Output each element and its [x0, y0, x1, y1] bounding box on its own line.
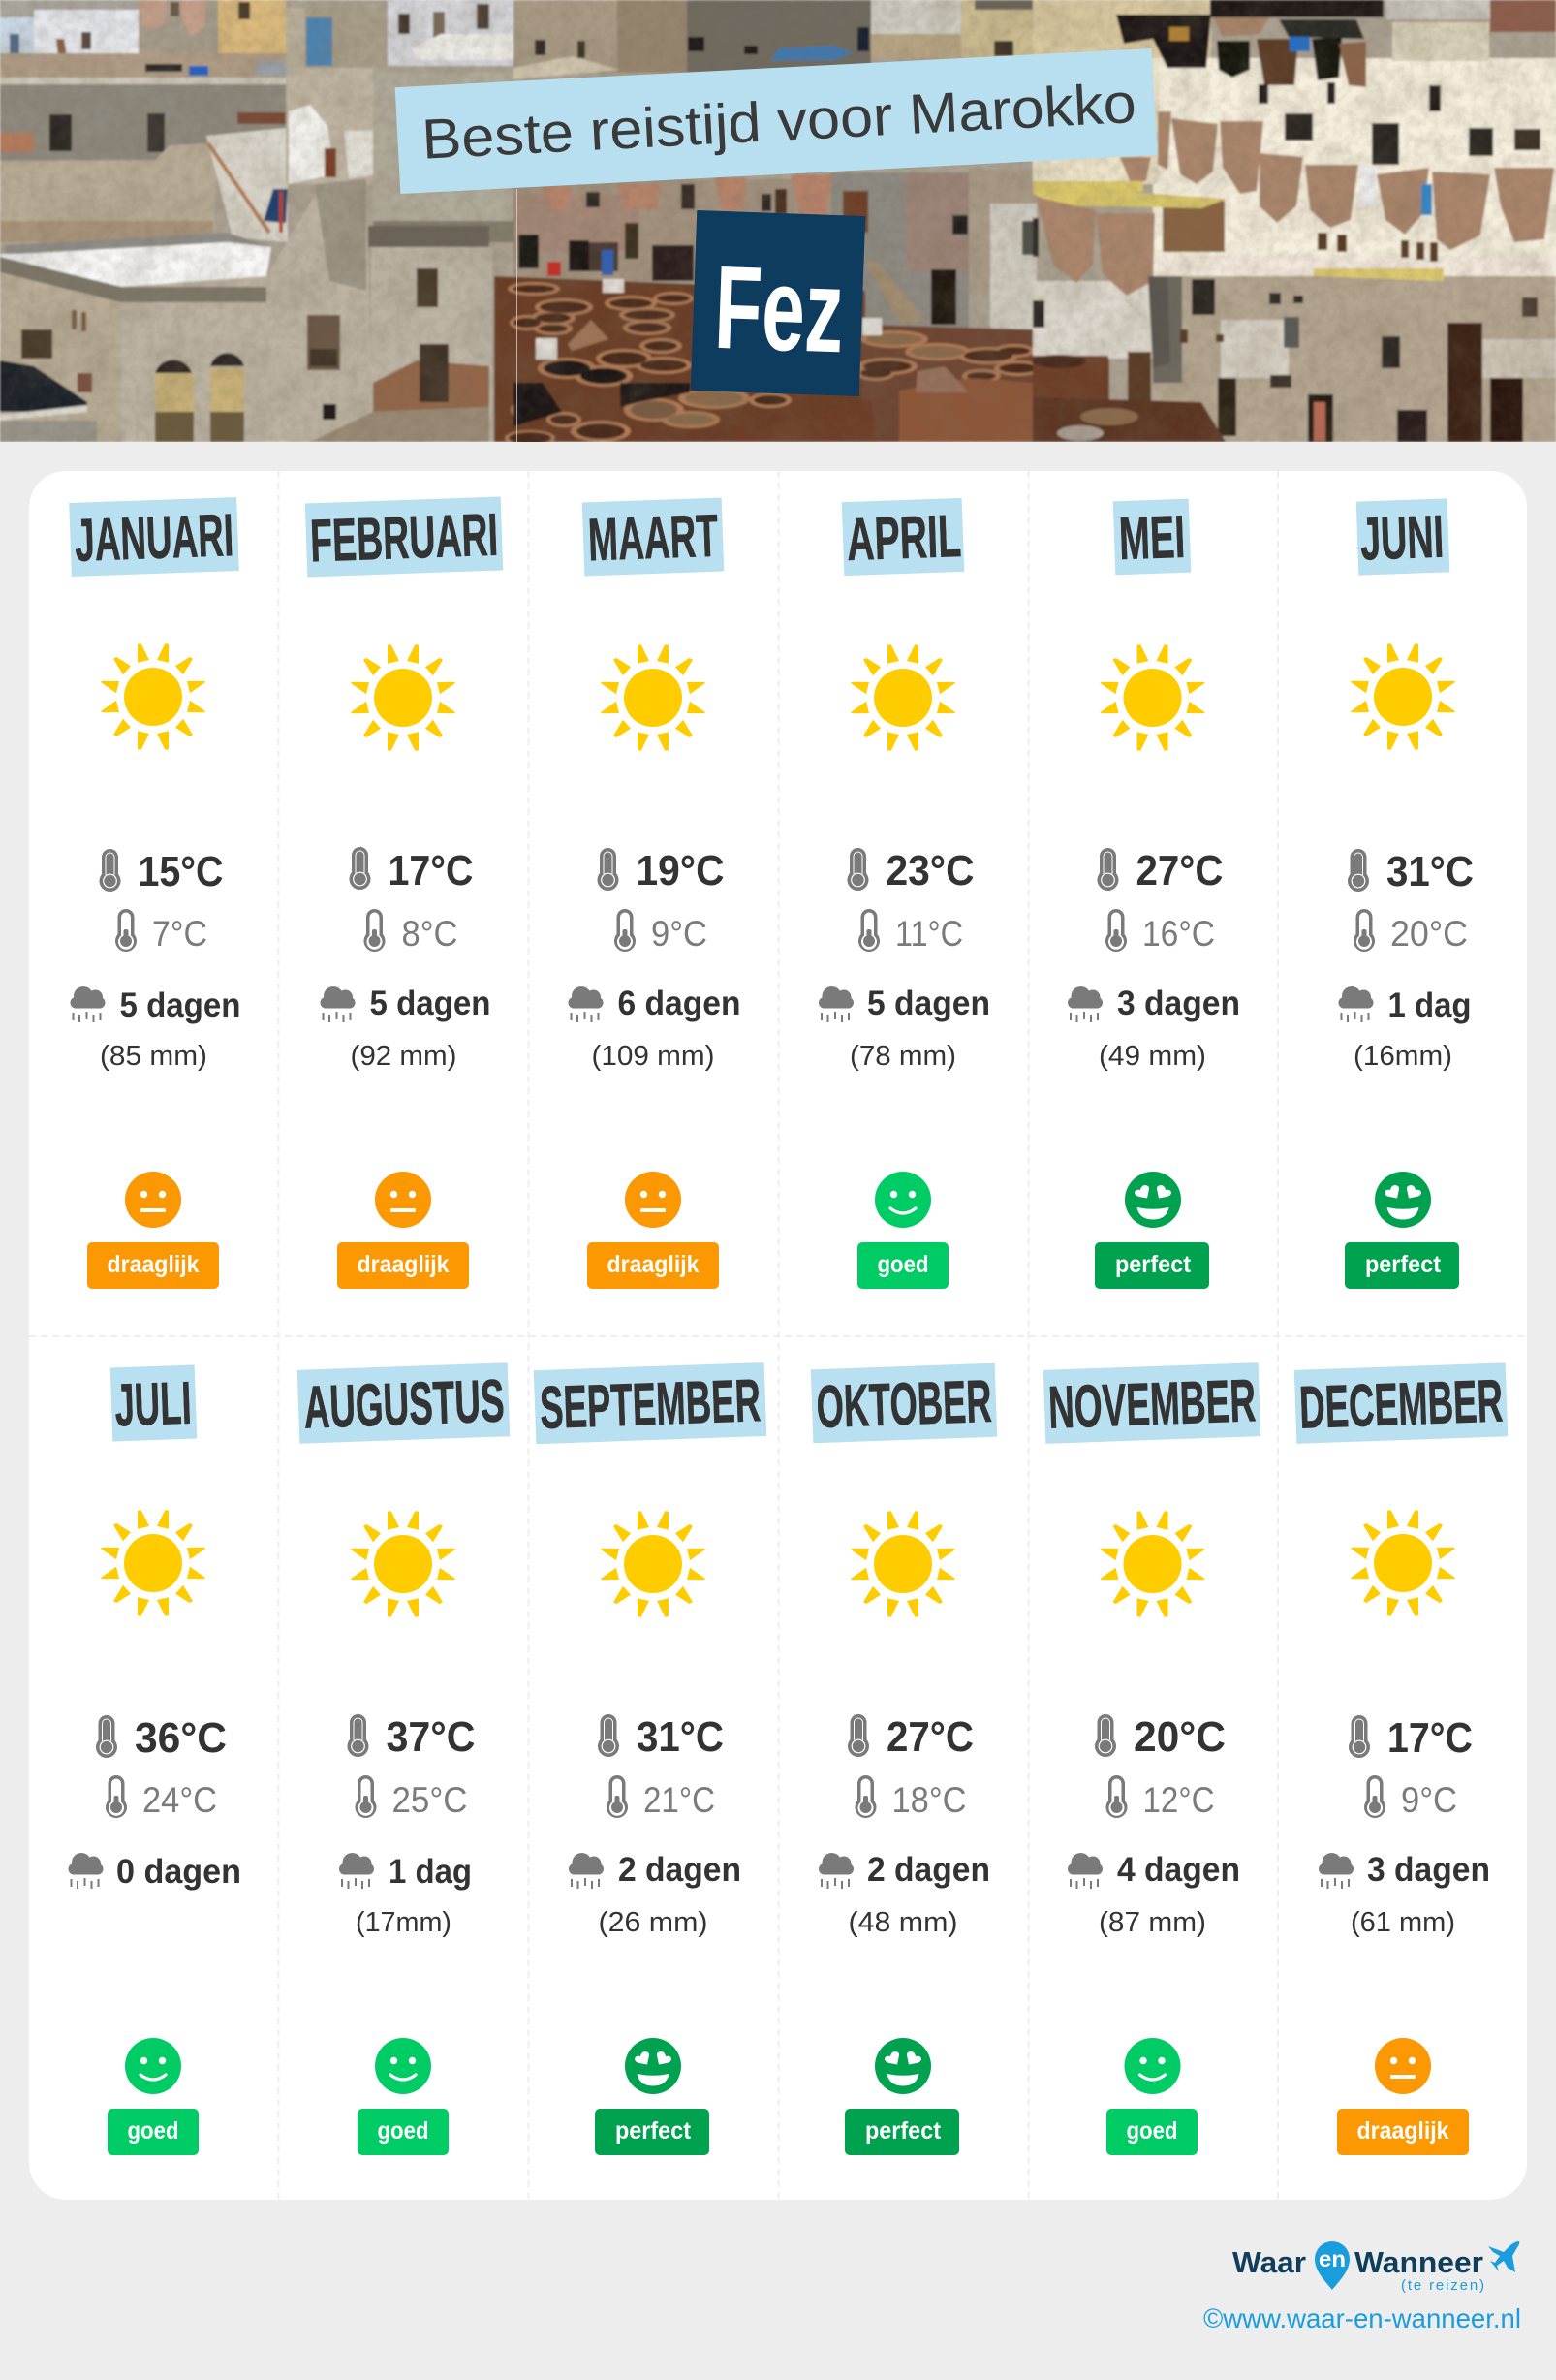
icon: sun	[101, 643, 205, 750]
rain days	[339, 1853, 472, 1891]
rain days: 0 dagen	[116, 1853, 241, 1891]
high temperature	[1348, 848, 1474, 895]
month label: APRIL	[846, 503, 962, 574]
icon: sun	[1100, 644, 1205, 751]
low temperature: 24°C	[142, 1780, 217, 1820]
month label: MEI	[1118, 504, 1186, 573]
rain days: 1 dag	[389, 1853, 472, 1891]
high temperature: 27°C	[1136, 847, 1223, 894]
rain days	[569, 1851, 741, 1889]
month label: MAART	[587, 503, 719, 574]
icon: map pin: en	[1319, 2246, 1346, 2271]
low temperature: 20°C	[1390, 914, 1468, 954]
high temperature	[99, 848, 223, 895]
low temperature	[355, 1775, 467, 1820]
logo: Waar en Wanneer: (te reizen)	[1401, 2277, 1484, 2294]
low temperature	[106, 1775, 217, 1820]
high temperature: 20°C	[1134, 1713, 1226, 1761]
rain days: 2 dagen	[618, 1851, 741, 1889]
high temperature	[847, 847, 975, 894]
rain days: 3 dagen	[1367, 1851, 1490, 1889]
rain days	[1068, 1851, 1240, 1889]
rating badge	[1095, 1242, 1209, 1289]
website credit: ©www.waar-en-wanneer.nl	[1203, 2303, 1521, 2333]
icon: neutral face	[375, 1172, 431, 1228]
icon: airplane	[1488, 2241, 1519, 2272]
month label: OKTOBER	[815, 1368, 993, 1441]
rating badge: goed	[1126, 2117, 1178, 2145]
rating badge	[595, 2109, 709, 2155]
month: december	[1294, 1362, 1508, 2155]
rating badge	[337, 1242, 469, 1289]
low temperature	[115, 909, 207, 954]
rating badge	[857, 1242, 949, 1289]
rating badge: perfect	[865, 2117, 942, 2145]
rainfall: (85 mm)	[100, 1041, 207, 1072]
icon: love-eyes face	[1125, 1172, 1181, 1228]
low temperature: 16°C	[1142, 914, 1215, 954]
high temperature: 17°C	[388, 847, 473, 894]
rain days: 6 dagen	[618, 985, 740, 1022]
high temperature	[347, 1713, 475, 1761]
logo: Waar en Wanneer: Waar	[1232, 2245, 1306, 2279]
low temperature: 12°C	[1143, 1780, 1215, 1820]
rain days	[1319, 1851, 1490, 1889]
month label	[297, 1362, 510, 1444]
rainfall: (17mm)	[356, 1907, 451, 1938]
high temperature	[1097, 847, 1223, 894]
high temperature	[349, 847, 473, 894]
icon: happy face	[125, 2038, 181, 2094]
rating badge: perfect	[615, 2117, 692, 2145]
rain days	[819, 985, 990, 1022]
low temperature	[858, 909, 963, 954]
high temperature	[598, 1713, 724, 1761]
low temperature: 9°C	[1401, 1780, 1457, 1820]
low temperature	[614, 909, 707, 954]
rainfall: (49 mm)	[1099, 1041, 1206, 1072]
low temperature	[855, 1775, 967, 1820]
header photo: tanneries of Fez	[0, 0, 1556, 446]
rainfall: (48 mm)	[849, 1907, 957, 1938]
rating badge	[1337, 2109, 1469, 2155]
rating badge: draaglijk	[1356, 2117, 1449, 2145]
title banner	[395, 48, 1157, 194]
month: april	[819, 498, 990, 1289]
rain days	[819, 1851, 990, 1889]
month label: NOVEMBER	[1047, 1367, 1257, 1442]
month: mei	[1068, 499, 1240, 1289]
icon: sun	[1351, 1510, 1455, 1616]
month label	[582, 498, 724, 576]
low temperature	[607, 1775, 715, 1820]
rating badge	[845, 2109, 959, 2155]
rating badge: draaglijk	[607, 1251, 700, 1278]
high temperature	[1349, 1714, 1473, 1762]
rainfall: (78 mm)	[850, 1041, 956, 1072]
high temperature	[96, 1714, 227, 1762]
icon: love-eyes face	[875, 2038, 931, 2094]
rainfall: (16mm)	[1354, 1041, 1452, 1072]
month label: JULI	[113, 1370, 193, 1439]
rating badge	[1345, 1242, 1459, 1289]
month label: AUGUSTUS	[302, 1367, 506, 1442]
icon: sun	[1100, 1511, 1205, 1617]
low temperature: 21°C	[643, 1780, 715, 1820]
rainfall: (109 mm)	[591, 1041, 715, 1072]
month: januari	[69, 497, 241, 1289]
rating badge: draaglijk	[357, 1251, 450, 1278]
icon: love-eyes face	[625, 2038, 681, 2094]
rain days: 2 dagen	[867, 1851, 990, 1889]
high temperature	[848, 1713, 974, 1761]
month label	[305, 496, 503, 578]
low temperature: 9°C	[651, 914, 707, 954]
rain days	[1068, 985, 1240, 1022]
rating badge: perfect	[1365, 1251, 1442, 1278]
rating badge: goed	[378, 2117, 428, 2145]
icon: sun	[851, 1511, 955, 1617]
month: maart	[568, 498, 740, 1289]
high temperature: 27°C	[887, 1713, 974, 1761]
high temperature	[597, 847, 725, 894]
high temperature: 19°C	[636, 847, 725, 894]
rain days	[320, 985, 490, 1022]
rating badge: draaglijk	[107, 1251, 200, 1278]
icon: sun	[601, 644, 705, 751]
month: oktober	[811, 1363, 997, 2155]
icon: happy face	[875, 1172, 931, 1228]
rating badge: perfect	[1115, 1251, 1192, 1278]
icon: sun	[351, 644, 455, 751]
month label	[1043, 1362, 1260, 1444]
month label: JUNI	[1359, 504, 1445, 574]
icon: happy face	[1124, 2038, 1180, 2094]
low temperature: 18°C	[891, 1780, 967, 1820]
low temperature	[1105, 909, 1215, 954]
month: september	[534, 1362, 766, 2155]
logo: Waar en Wanneer: Wanneer	[1354, 2245, 1483, 2279]
rainfall: (61 mm)	[1351, 1907, 1455, 1938]
rating badge: goed	[128, 2117, 178, 2145]
icon: sun	[601, 1511, 705, 1617]
low temperature	[364, 909, 457, 954]
icon: happy face	[375, 2038, 431, 2094]
month label	[1113, 499, 1191, 575]
rating badge	[1106, 2109, 1198, 2155]
low temperature	[1364, 1775, 1457, 1820]
rain days: 5 dagen	[120, 986, 240, 1024]
city label: Fez: Fez	[712, 241, 846, 377]
rating badge	[87, 1242, 219, 1289]
month label	[811, 1363, 997, 1443]
rain days: 5 dagen	[867, 985, 990, 1022]
low temperature: 11°C	[895, 914, 963, 954]
icon: sun	[851, 644, 955, 751]
rain days: 4 dagen	[1117, 1851, 1240, 1889]
month label	[842, 498, 964, 576]
icon: sun	[351, 1511, 455, 1617]
city label: Fez	[691, 210, 865, 396]
high temperature: 23°C	[886, 847, 975, 894]
month: juli	[68, 1364, 241, 2155]
high temperature: 15°C	[138, 848, 223, 895]
title banner: Beste reistijd voor Marokko	[420, 72, 1137, 172]
month label: JANUARI	[74, 502, 234, 575]
month label	[1356, 498, 1449, 576]
low temperature: 25°C	[391, 1780, 467, 1820]
month label: FEBRUARI	[309, 502, 499, 575]
icon: love-eyes face	[1375, 1172, 1431, 1228]
month: juni	[1339, 498, 1474, 1289]
icon: neutral face	[1375, 2038, 1431, 2094]
main calendar card	[29, 471, 1527, 2200]
rating badge	[587, 1242, 719, 1289]
icon: sun	[1351, 643, 1455, 750]
month label: SEPTEMBER	[539, 1367, 762, 1442]
rain days: 1 dag	[1387, 986, 1471, 1024]
rating badge	[358, 2109, 449, 2155]
icon: map pin	[1315, 2241, 1350, 2290]
high temperature: 17°C	[1387, 1714, 1473, 1762]
low temperature: 7°C	[152, 914, 207, 954]
high temperature: 36°C	[135, 1714, 227, 1762]
rainfall: (26 mm)	[599, 1907, 707, 1938]
rainfall: (87 mm)	[1099, 1907, 1206, 1938]
icon: neutral face	[125, 1172, 181, 1228]
rain days: 3 dagen	[1117, 985, 1240, 1022]
high temperature: 31°C	[1386, 848, 1474, 895]
rain days	[70, 986, 240, 1024]
low temperature	[1106, 1775, 1215, 1820]
rain days	[1339, 986, 1471, 1024]
low temperature	[1354, 909, 1468, 954]
rain days: 5 dagen	[370, 985, 490, 1022]
month label	[110, 1364, 197, 1441]
month: februari	[305, 496, 503, 1289]
icon: sun	[101, 1510, 205, 1616]
high temperature: 31°C	[637, 1713, 724, 1761]
logo: Waar en Wanneer	[1232, 2241, 1519, 2294]
rain days	[568, 985, 740, 1022]
low temperature: 8°C	[401, 914, 457, 954]
icon: neutral face	[625, 1172, 681, 1228]
month: augustus	[297, 1362, 510, 2155]
month: november	[1043, 1362, 1260, 2155]
month label	[534, 1362, 766, 1444]
rating badge	[108, 2109, 199, 2155]
high temperature	[1095, 1713, 1226, 1761]
month label	[69, 497, 239, 577]
high temperature: 37°C	[386, 1713, 475, 1761]
rating badge: goed	[878, 1251, 928, 1278]
rainfall: (92 mm)	[351, 1041, 457, 1072]
